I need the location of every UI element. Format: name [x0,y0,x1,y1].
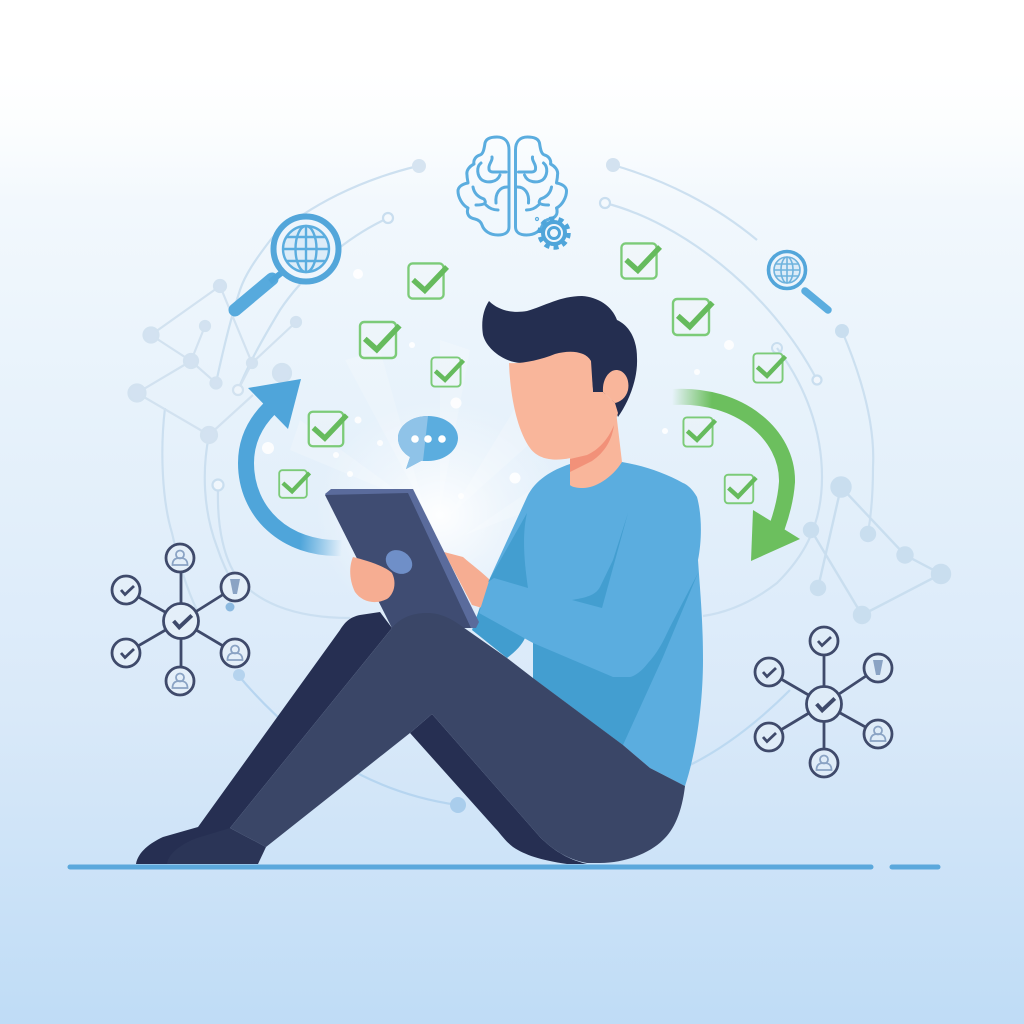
sparkle dots [262,269,734,499]
icon: brain with gear [458,137,566,235]
back leg and foot [136,612,392,864]
sweater torso [479,462,703,786]
background network arcs [162,165,873,805]
tablet light rays [290,340,570,630]
icon: gear [540,218,568,248]
icon: small magnifier globe [768,252,828,310]
checkmarks [279,243,785,503]
background network nodes left [128,280,301,443]
person [136,296,703,864]
hair [482,296,637,417]
face [509,352,618,460]
right hand [444,552,492,608]
front leg [230,613,685,863]
network icon left [112,544,249,695]
icon: large magnifier globe [235,216,338,310]
green curved arrow [672,397,800,561]
tablet [325,489,479,628]
sweater shadows [488,513,698,745]
speech bubble [398,416,458,469]
floor line [70,864,938,870]
ear [603,370,628,403]
thigh underside shadow [410,714,587,864]
neck [570,403,622,488]
neck shadow [570,425,614,472]
front shoe [167,828,266,864]
background network nodes right [804,478,950,623]
blue curved arrow [246,379,342,548]
arc end nodes [212,158,849,813]
sleeve underside [472,607,525,658]
network icon right [755,627,892,777]
left hand [350,557,394,602]
